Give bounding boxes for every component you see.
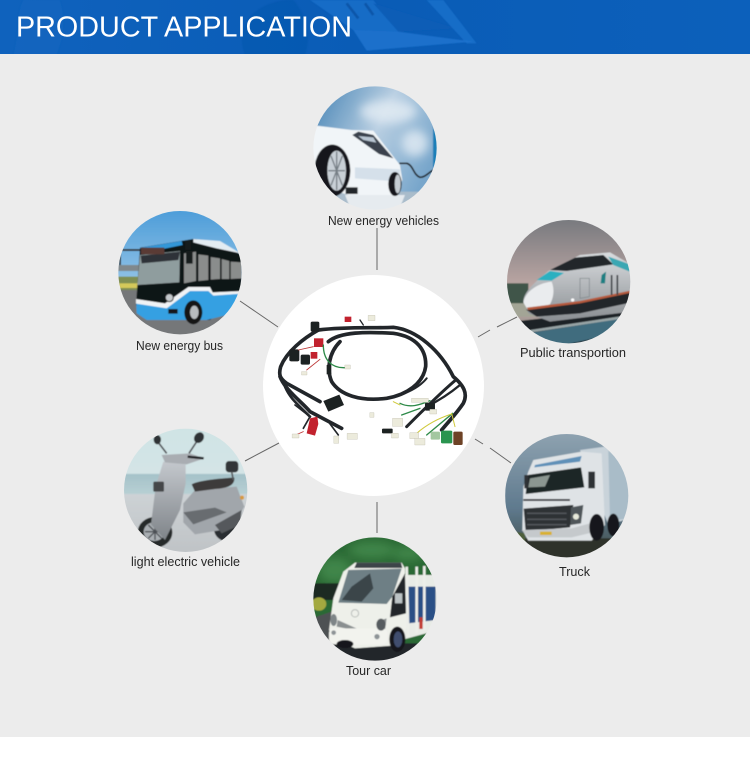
item: truck — [505, 433, 630, 579]
photo: electric car charging — [312, 85, 438, 212]
item: tour car — [312, 537, 440, 678]
connector lines — [240, 228, 517, 533]
item: light electric vehicle — [123, 428, 248, 569]
photo: bus — [117, 210, 243, 337]
photo: truck — [505, 433, 630, 560]
photo: electric scooter — [123, 428, 248, 553]
label: New energy bus — [136, 338, 223, 353]
center circle: wiring harness — [263, 275, 484, 496]
label: New energy vehicles — [328, 213, 439, 228]
item: public transportion — [505, 218, 633, 360]
connectors — [289, 322, 435, 433]
label: Truck — [559, 564, 590, 579]
title: PRODUCT APPLICATION — [16, 12, 352, 44]
label: Tour car — [346, 663, 392, 678]
header banner — [0, 0, 750, 55]
photo: sightseeing car — [312, 537, 440, 663]
wiring harness product — [280, 315, 465, 445]
label: light electric vehicle — [131, 554, 240, 569]
photo: high speed train — [505, 218, 633, 347]
item: new energy vehicles — [312, 85, 439, 228]
label: Public transportion — [520, 345, 626, 360]
item: new energy bus — [117, 210, 243, 353]
